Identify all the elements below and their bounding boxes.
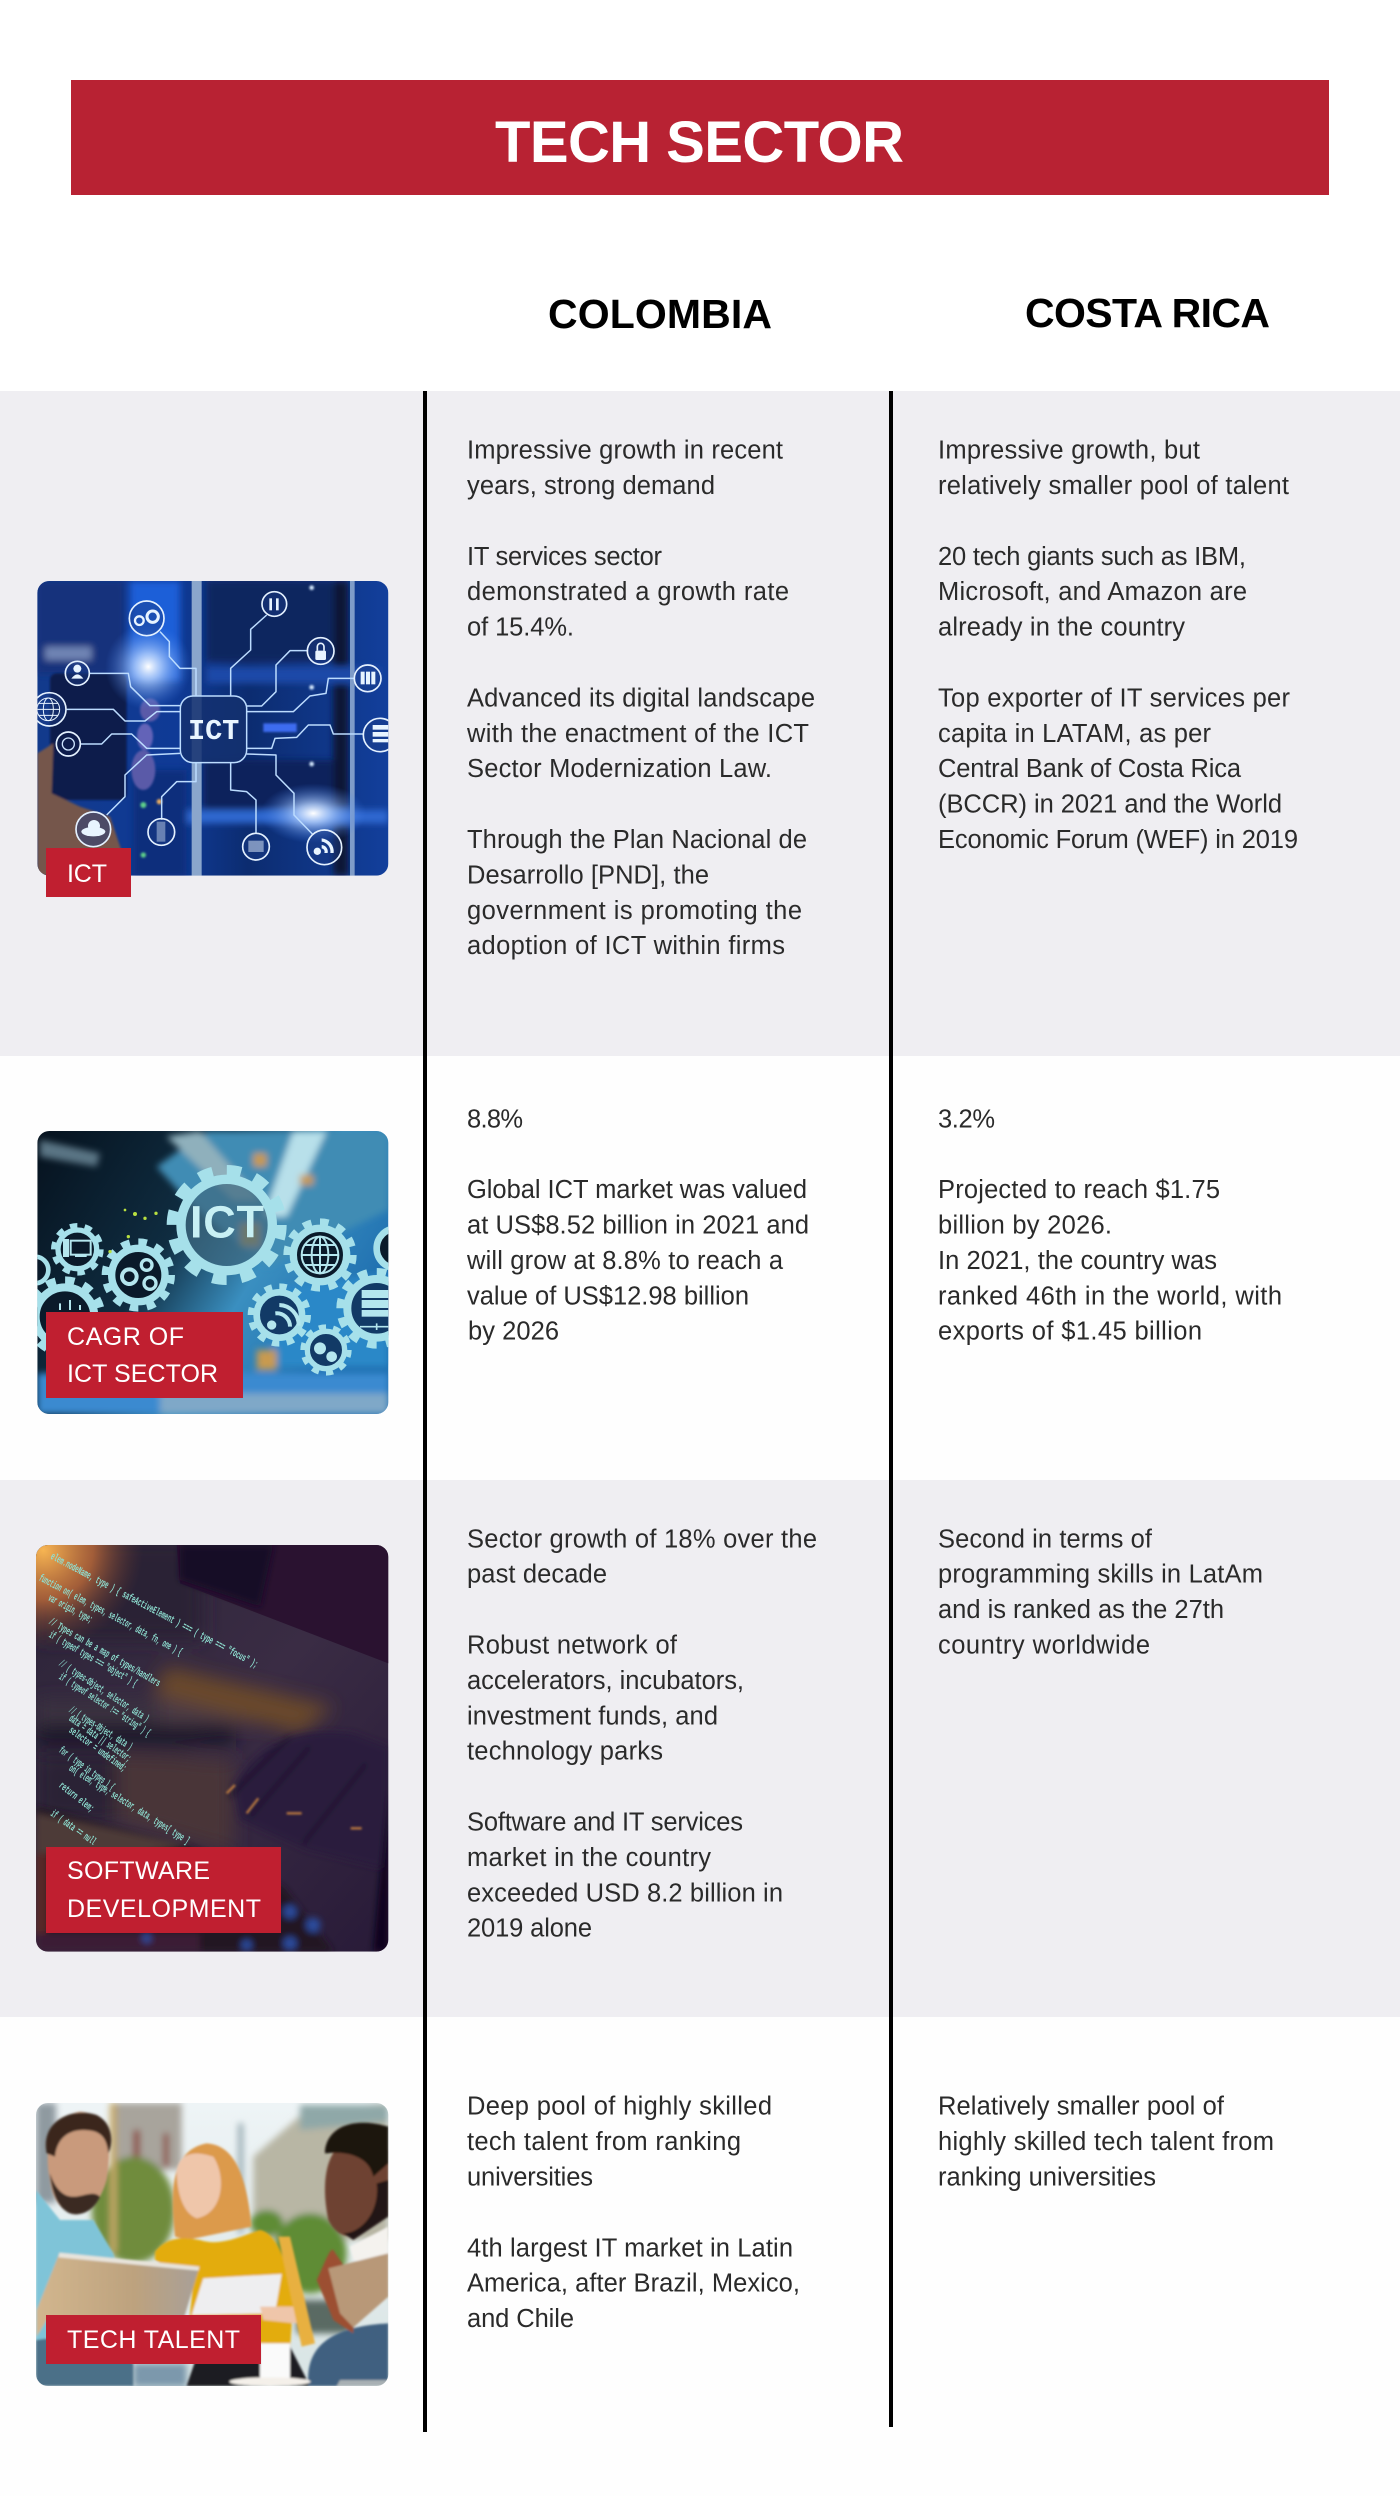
text: Colombia tech talent: tech talent from ranking — [467, 2128, 741, 2156]
text: Colombia CAGR: will grow at 8.8% to reach a — [466, 1247, 784, 1275]
column heading: Costa Rica: COSTA RICA — [1025, 290, 1270, 336]
text: Colombia software: accelerators, incubators, — [467, 1667, 744, 1695]
label: CAGR of ICT sector: CAGR OF — [67, 1323, 184, 1351]
text: Costa Rica ICT: relatively smaller pool of talent — [938, 472, 1289, 500]
label: tech talent: TECH TALENT — [67, 2326, 240, 2354]
image: code overlay on laptop: selector = undefined; — [66, 1725, 128, 1775]
text: Costa Rica ICT: capita in LATAM, as per — [938, 720, 1212, 748]
text: Colombia tech talent: America, after Brazil, Mexico, — [467, 2270, 800, 2298]
text: Costa Rica CAGR: billion by 2026. — [938, 1212, 1112, 1240]
text: Colombia ICT: Through the Plan Nacional de — [467, 826, 807, 854]
text: Colombia ICT: government is promoting the — [467, 897, 802, 925]
text: Costa Rica ICT: Central Bank of Costa Rica — [938, 755, 1242, 783]
image: code overlay on laptop: // Types can be a map of types/handlers — [46, 1616, 162, 1690]
label: CAGR of ICT sector: ICT SECTOR — [67, 1360, 218, 1388]
title banner — [71, 80, 1329, 195]
text: Colombia CAGR: value of US$12.98 billion — [467, 1282, 749, 1310]
text: Colombia ICT: of 15.4%. — [467, 614, 574, 642]
image: code overlay on laptop: if ( typeof selector !== "string" ) { — [56, 1672, 152, 1740]
text: Colombia software: 2019 alone — [467, 1915, 592, 1943]
text: Colombia tech talent — [467, 2093, 800, 2333]
text: Costa Rica ICT: 20 tech giants such as IBM, — [938, 543, 1246, 571]
text: Colombia tech talent: Deep pool of highly skilled — [467, 2093, 772, 2121]
image: code overlay on laptop: if ( typeof types === "object" ) { — [46, 1630, 139, 1690]
text: Colombia software: technology parks — [467, 1738, 663, 1766]
image: three students with laptop — [36, 2103, 388, 2387]
text: Colombia software: Sector growth of 18% over the — [467, 1525, 817, 1553]
text: Colombia ICT: Sector Modernization Law. — [467, 755, 772, 783]
text: Colombia tech talent: and Chile — [467, 2305, 574, 2333]
image: ICT gears over network cables: ICT — [190, 1196, 264, 1247]
image: code overlay on laptop: if ( data == null — [48, 1808, 98, 1848]
label: software development: SOFTWARE — [67, 1857, 210, 1885]
text: Costa Rica tech talent: ranking universities — [938, 2164, 1156, 2192]
text: Costa Rica ICT: (BCCR) in 2021 and the World — [938, 791, 1282, 819]
image: ICT gears over network cables — [37, 1131, 388, 1414]
image: ICT circuit over server racks — [33, 581, 397, 877]
image: code overlay on laptop: function on( elem, types, selector, data, fn, one ) { — [36, 1573, 184, 1659]
text: Costa Rica CAGR: In 2021, the country was — [938, 1247, 1217, 1275]
text: Costa Rica ICT: Microsoft, and Amazon are — [938, 578, 1247, 606]
image: code overlay on laptop — [36, 1545, 388, 1952]
panel: software development row — [0, 1450, 1400, 2017]
text: Costa Rica tech talent — [938, 2093, 1274, 2192]
text: Costa Rica ICT — [938, 437, 1298, 854]
text: Colombia software: Software and IT services — [467, 1808, 743, 1836]
text: Colombia ICT — [466, 437, 815, 960]
text: Costa Rica software — [938, 1525, 1263, 1660]
text: Costa Rica CAGR: exports of $1.45 billion — [938, 1318, 1202, 1346]
text: Costa Rica software: country worldwide — [938, 1632, 1150, 1660]
image: ICT circuit over server racks: ICT — [188, 715, 239, 748]
title banner: TECH SECTOR — [495, 110, 904, 175]
image: code overlay on laptop: on( elem, type, selector, data, types[ type ] — [66, 1763, 191, 1848]
text: Costa Rica CAGR: ranked 46th in the world, with — [938, 1282, 1282, 1310]
image: code overlay on laptop: // ( types-Object, selector, data ) — [56, 1658, 151, 1726]
text: Costa Rica software: Second in terms of — [938, 1525, 1153, 1553]
image: code overlay on laptop: for ( type in types ) { — [56, 1745, 116, 1794]
text: Colombia ICT: with the enactment of the ICT — [466, 720, 809, 748]
label: software development: DEVELOPMENT — [67, 1895, 261, 1923]
text: Colombia ICT: IT services sector — [467, 543, 662, 571]
text: Colombia software: market in the country — [467, 1844, 711, 1872]
text: Colombia ICT: Impressive growth in recent — [467, 437, 783, 465]
text: Costa Rica software: programming skills in LatAm — [938, 1561, 1263, 1589]
image: code overlay on laptop: // ( types-Object, data ) — [66, 1705, 134, 1754]
label: ICT — [46, 848, 131, 897]
text: Colombia CAGR: by 2026 — [468, 1318, 559, 1346]
label: ICT: ICT — [67, 860, 107, 888]
text: Colombia software: exceeded USD 8.2 billion in — [467, 1879, 783, 1907]
text: Colombia tech talent: universities — [467, 2164, 593, 2192]
image: code overlay on laptop: var origin, type; — [46, 1593, 94, 1626]
text: Colombia CAGR — [466, 1105, 809, 1346]
text: Costa Rica ICT: Top exporter of IT services per — [938, 684, 1290, 712]
panel: tech talent row — [36, 2096, 1272, 2386]
text: Costa Rica ICT: already in the country — [938, 614, 1185, 642]
image: code overlay on laptop: elem.nodeName, type ) { safeActiveElement ) === ( type === "focus" ); — [48, 1551, 260, 1671]
text: Colombia software: investment funds, and — [467, 1702, 718, 1730]
text: Costa Rica CAGR — [938, 1105, 1282, 1346]
text: Colombia ICT: demonstrated a growth rate — [467, 578, 789, 606]
text: Colombia CAGR: at US$8.52 billion in 2021 and — [467, 1212, 809, 1240]
text: Costa Rica software: and is ranked as the 27th — [938, 1596, 1224, 1624]
image: code overlay on laptop: data = data || selector; — [66, 1713, 133, 1765]
text: Colombia ICT: Desarrollo [PND], the — [467, 861, 709, 889]
text: Costa Rica ICT: Impressive growth, but — [938, 437, 1200, 465]
text: Costa Rica tech talent: Relatively smaller pool of — [938, 2093, 1225, 2121]
label: tech talent — [46, 2315, 261, 2364]
text: Colombia software — [467, 1525, 817, 1943]
text: Colombia tech talent: 4th largest IT market in Latin — [467, 2234, 793, 2262]
panel: ICT row — [0, 391, 1400, 1056]
text: Colombia software: past decade — [467, 1561, 607, 1589]
text: Costa Rica CAGR: 3.2% — [938, 1105, 995, 1133]
text: Colombia ICT: adoption of ICT within firms — [467, 932, 785, 960]
text: Colombia ICT: Advanced its digital landscape — [467, 684, 815, 712]
text: Colombia CAGR: Global ICT market was valued — [467, 1176, 807, 1204]
image: code overlay on laptop: return elem; — [56, 1780, 96, 1815]
text: Colombia CAGR: 8.8% — [467, 1105, 523, 1133]
text: Costa Rica ICT: Economic Forum (WEF) in 2019 — [938, 826, 1298, 854]
label: software development — [46, 1847, 281, 1933]
text: Costa Rica CAGR: Projected to reach $1.75 — [938, 1176, 1220, 1204]
text: Colombia software: Robust network of — [467, 1632, 678, 1660]
panel: CAGR of ICT sector row — [37, 1109, 1280, 1414]
text: Colombia ICT: years, strong demand — [467, 472, 715, 500]
label: CAGR of ICT sector — [46, 1312, 243, 1398]
text: Costa Rica tech talent: highly skilled tech talent from — [938, 2128, 1274, 2156]
column heading: Colombia: COLOMBIA — [548, 291, 772, 337]
